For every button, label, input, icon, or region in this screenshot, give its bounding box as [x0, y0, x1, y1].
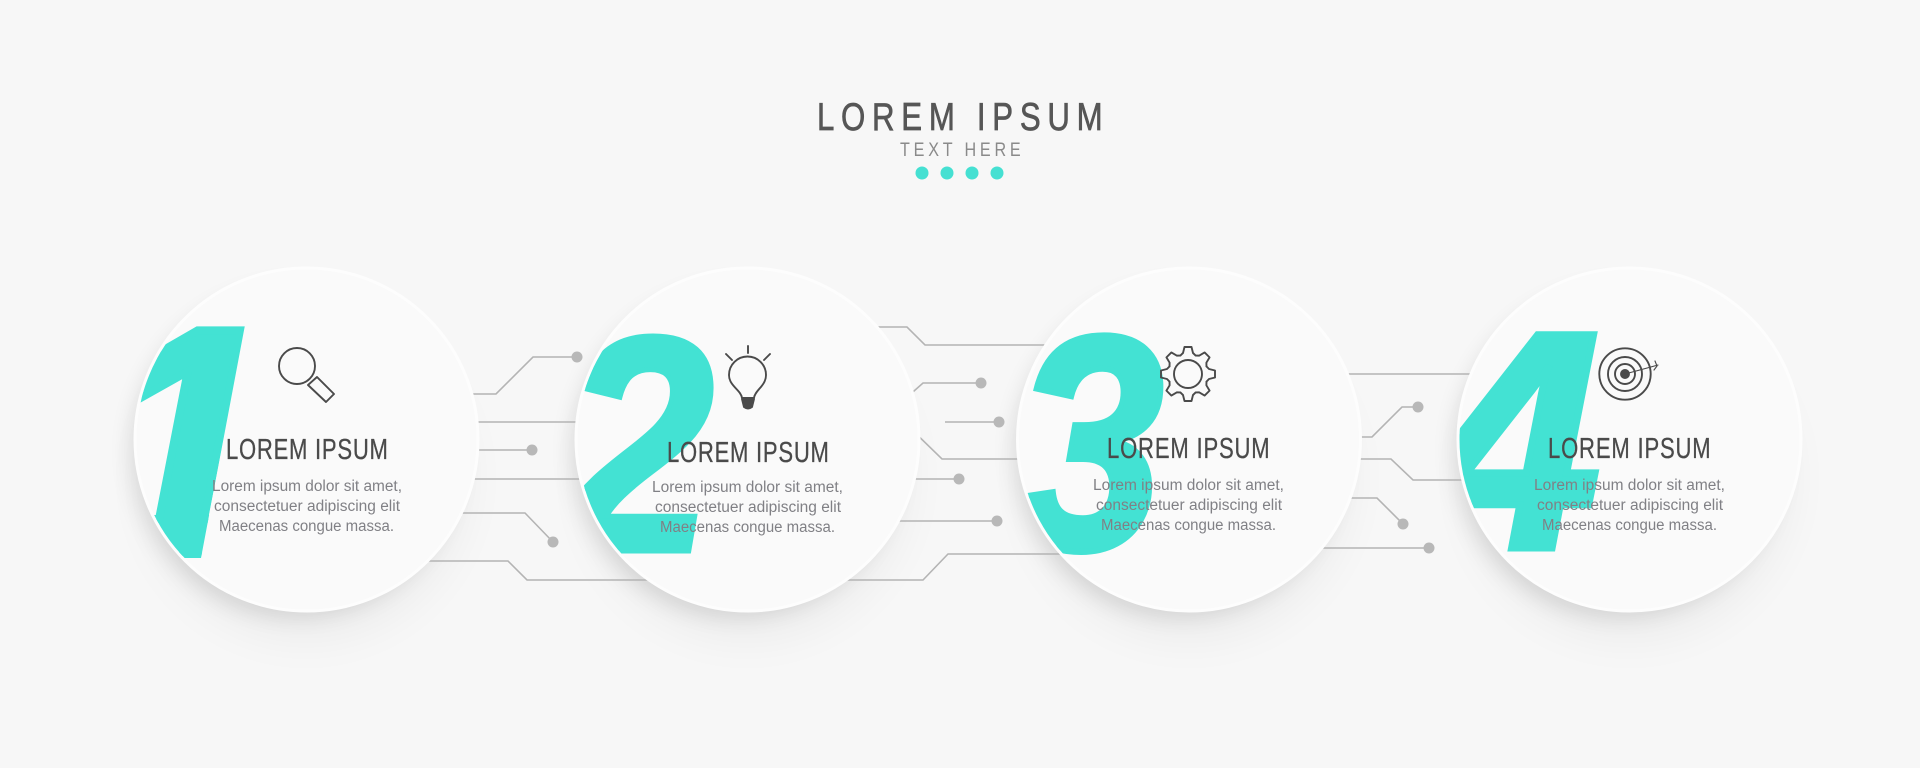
disc 2: [576, 268, 919, 611]
connector lines 2 to 3: [840, 327, 1080, 580]
body 4: [1534, 477, 1725, 534]
number 3: 3: [1014, 273, 1164, 615]
body 1: [212, 478, 402, 535]
panel: step 3: [1014, 268, 1360, 615]
icon: light bulb: [726, 346, 770, 408]
panel: step 2: [556, 268, 919, 617]
heading 2: LOREM IPSUM: [667, 437, 829, 469]
connector lines 3 to 4: [1310, 374, 1480, 554]
body 2: Maecenas congue massa.: [660, 519, 835, 536]
title dots: [916, 166, 1004, 180]
heading 3: LOREM IPSUM: [1107, 433, 1270, 465]
circle shadows: [130, 285, 1787, 636]
disc 1: [135, 268, 478, 611]
body 4: consectetuer adipiscing elit: [1537, 497, 1724, 514]
icon: target: [1599, 348, 1658, 400]
panel: step 1: [134, 277, 480, 612]
body 1: consectetuer adipiscing elit: [214, 498, 401, 515]
disc 3: [1018, 268, 1360, 611]
icon: gear: [1161, 347, 1215, 401]
body 3: [1093, 477, 1284, 534]
icon: magnifier: [279, 348, 334, 402]
title: LOREM IPSUM: [817, 96, 1103, 139]
heading 1: LOREM IPSUM: [226, 434, 388, 466]
body 4: Lorem ipsum dolor sit amet,: [1534, 477, 1725, 494]
body 2: consectetuer adipiscing elit: [655, 499, 842, 516]
body 3: Lorem ipsum dolor sit amet,: [1093, 477, 1284, 494]
body 2: [652, 479, 843, 536]
body 3: Maecenas congue massa.: [1101, 517, 1276, 534]
number 4: 4: [1418, 267, 1600, 614]
number 1: 1: [91, 259, 273, 626]
body 1: Lorem ipsum dolor sit amet,: [212, 478, 402, 495]
title block: [817, 96, 1103, 180]
subtitle: TEXT HERE: [900, 139, 1021, 160]
panel: step 4: [1456, 277, 1802, 612]
body 1: Maecenas congue massa.: [219, 518, 394, 535]
connector lines 1 to 2: [425, 352, 660, 580]
heading 4: LOREM IPSUM: [1548, 433, 1711, 465]
number 2: 2: [556, 273, 714, 617]
body 3: consectetuer adipiscing elit: [1096, 497, 1283, 514]
disc 4: [1458, 268, 1801, 611]
body 4: Maecenas congue massa.: [1542, 517, 1717, 534]
body 2: Lorem ipsum dolor sit amet,: [652, 479, 843, 496]
